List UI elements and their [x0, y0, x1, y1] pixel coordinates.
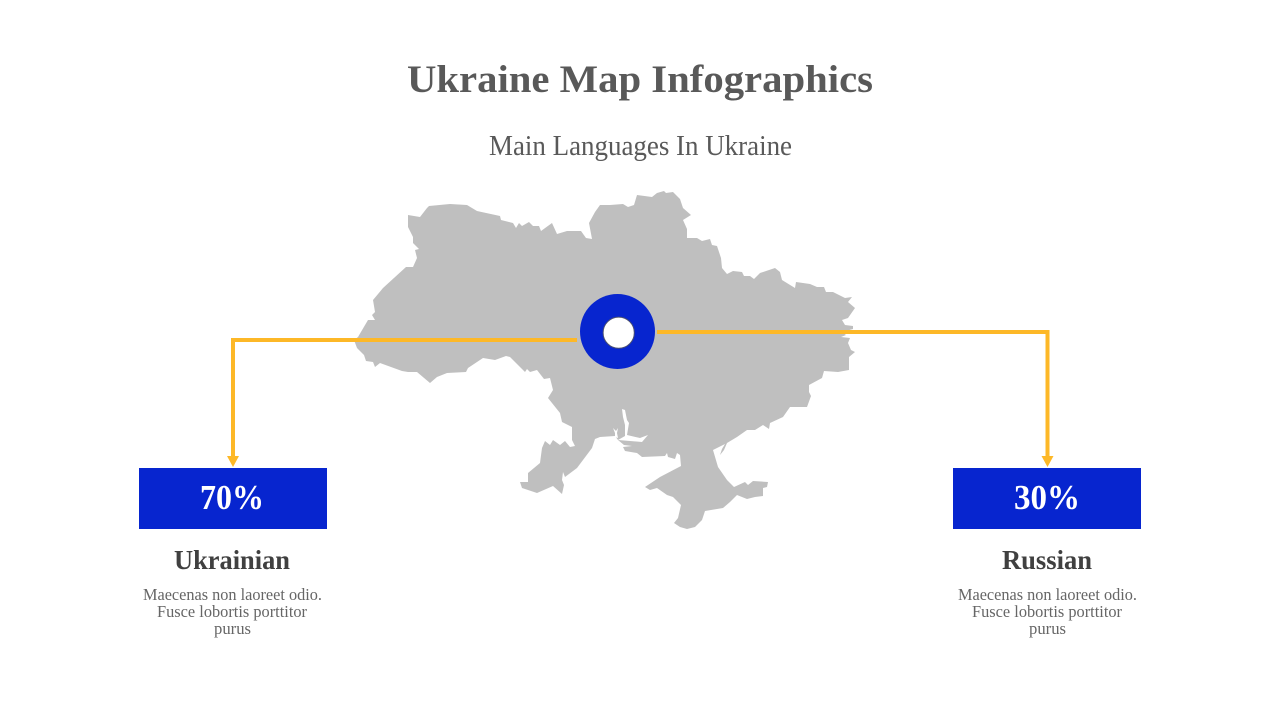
- description: Russian: Maecenas non laoreet odio.: [958, 585, 1137, 604]
- description: Ukrainian: purus: [214, 619, 251, 638]
- title: Ukraine Map Infographics: [407, 58, 873, 101]
- connector arrow: to Russian: [657, 332, 1054, 467]
- panel: Ukrainian: [139, 468, 327, 638]
- description: Russian: Fusce lobortis porttitor: [972, 602, 1122, 621]
- panel: Russian: [953, 468, 1141, 638]
- description: Russian: purus: [1029, 619, 1066, 638]
- description: Ukrainian: Fusce lobortis porttitor: [157, 602, 307, 621]
- connector arrow: to Ukrainian: [227, 340, 577, 467]
- value box: 30%: 30%: [1014, 478, 1080, 517]
- value box: 70%: 70%: [200, 478, 264, 517]
- value box: 70%: [139, 468, 327, 529]
- description: Ukrainian: Maecenas non laoreet odio.: [143, 585, 322, 604]
- map of Ukraine: [354, 191, 855, 529]
- map marker: [580, 294, 655, 369]
- subtitle: Main Languages In Ukraine: [489, 131, 792, 162]
- description: Ukrainian: [143, 585, 322, 638]
- heading: Ukrainian: Ukrainian: [174, 545, 290, 575]
- description: Russian: [958, 585, 1137, 638]
- heading: Russian: Russian: [1002, 545, 1092, 575]
- value box: 30%: [953, 468, 1141, 529]
